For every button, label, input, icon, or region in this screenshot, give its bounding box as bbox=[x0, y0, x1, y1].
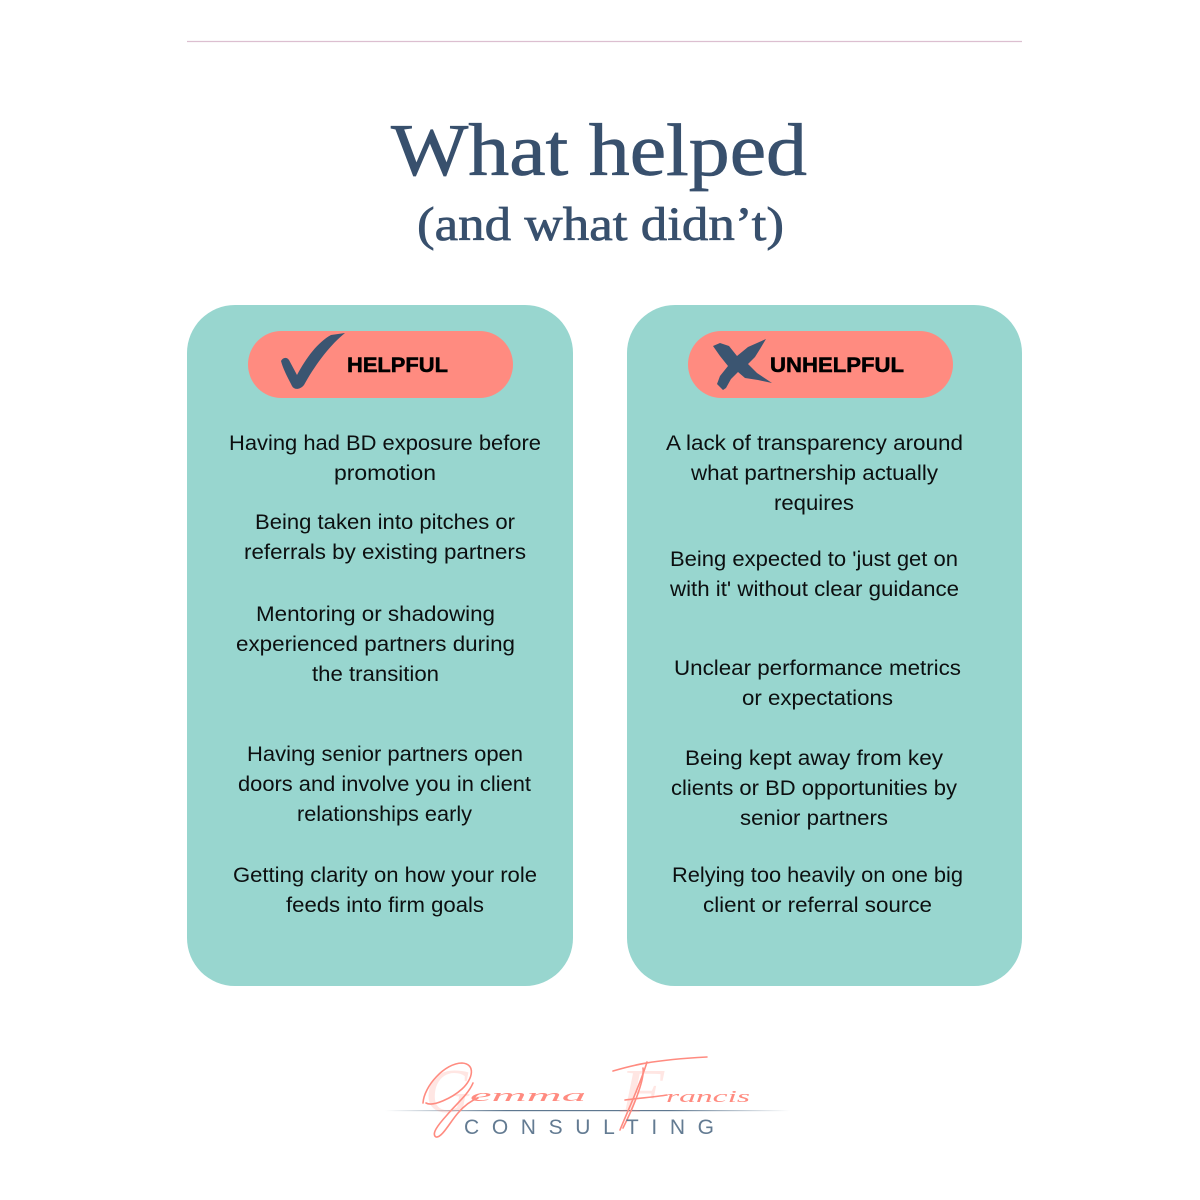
list: unhelpful items: clients or BD opportunities by bbox=[671, 776, 957, 800]
list: unhelpful items: with it' without clear guidance bbox=[669, 577, 959, 601]
list: unhelpful items: Unclear performance metrics bbox=[674, 656, 961, 680]
list: helpful items: Having had BD exposure before bbox=[229, 431, 541, 455]
list: unhelpful items: Being kept away from key bbox=[685, 746, 943, 770]
list: unhelpful items: Relying too heavily on one big bbox=[672, 863, 963, 887]
list: helpful items: Getting clarity on how your role bbox=[233, 863, 537, 887]
list: helpful items: doors and involve you in client bbox=[238, 772, 531, 796]
logo script name: G bbox=[425, 1058, 471, 1126]
list: helpful items: Mentoring or shadowing bbox=[256, 602, 495, 626]
badge label: unhelpful: UNHELPFUL bbox=[770, 354, 904, 377]
list: unhelpful items: requires bbox=[774, 491, 854, 515]
logo script name: F bbox=[619, 1058, 665, 1126]
logo script name: emma bbox=[470, 1086, 586, 1105]
title bbox=[391, 110, 807, 251]
panel: helpful bbox=[187, 305, 573, 986]
list: helpful items: Being taken into pitches or bbox=[255, 510, 515, 534]
list: helpful items: Having senior partners open bbox=[247, 742, 523, 766]
logo: Gemma Francis Consulting bbox=[385, 1057, 790, 1139]
logo script name: rancis bbox=[666, 1087, 751, 1106]
logo script name bbox=[423, 1057, 751, 1137]
list: unhelpful items: senior partners bbox=[740, 806, 888, 830]
list: helpful items: referrals by existing partners bbox=[244, 540, 526, 564]
badge: helpful bbox=[248, 331, 513, 398]
title: (and what didn’t) bbox=[417, 198, 784, 251]
list: helpful items: promotion bbox=[334, 461, 436, 485]
list: helpful items: relationships early bbox=[297, 802, 472, 826]
title: What helped bbox=[391, 110, 807, 192]
list: helpful items: feeds into firm goals bbox=[286, 893, 484, 917]
logo subtitle: CONSULTING bbox=[464, 1116, 714, 1139]
list: helpful items: the transition bbox=[312, 662, 439, 686]
list: unhelpful items: A lack of transparency around bbox=[666, 431, 963, 455]
badge: unhelpful bbox=[688, 331, 953, 398]
list: helpful items: experienced partners during bbox=[236, 632, 515, 656]
panel: unhelpful bbox=[627, 305, 1022, 986]
icon: cross mark bbox=[713, 339, 772, 390]
list: unhelpful items bbox=[666, 431, 963, 917]
icon: check mark bbox=[281, 333, 345, 389]
list: unhelpful items: or expectations bbox=[742, 686, 893, 710]
list: helpful items bbox=[229, 431, 541, 917]
list: unhelpful items: client or referral source bbox=[703, 893, 932, 917]
list: unhelpful items: what partnership actually bbox=[690, 461, 938, 485]
list: unhelpful items: Being expected to 'just get on bbox=[670, 547, 958, 571]
badge label: helpful: HELPFUL bbox=[347, 354, 448, 377]
